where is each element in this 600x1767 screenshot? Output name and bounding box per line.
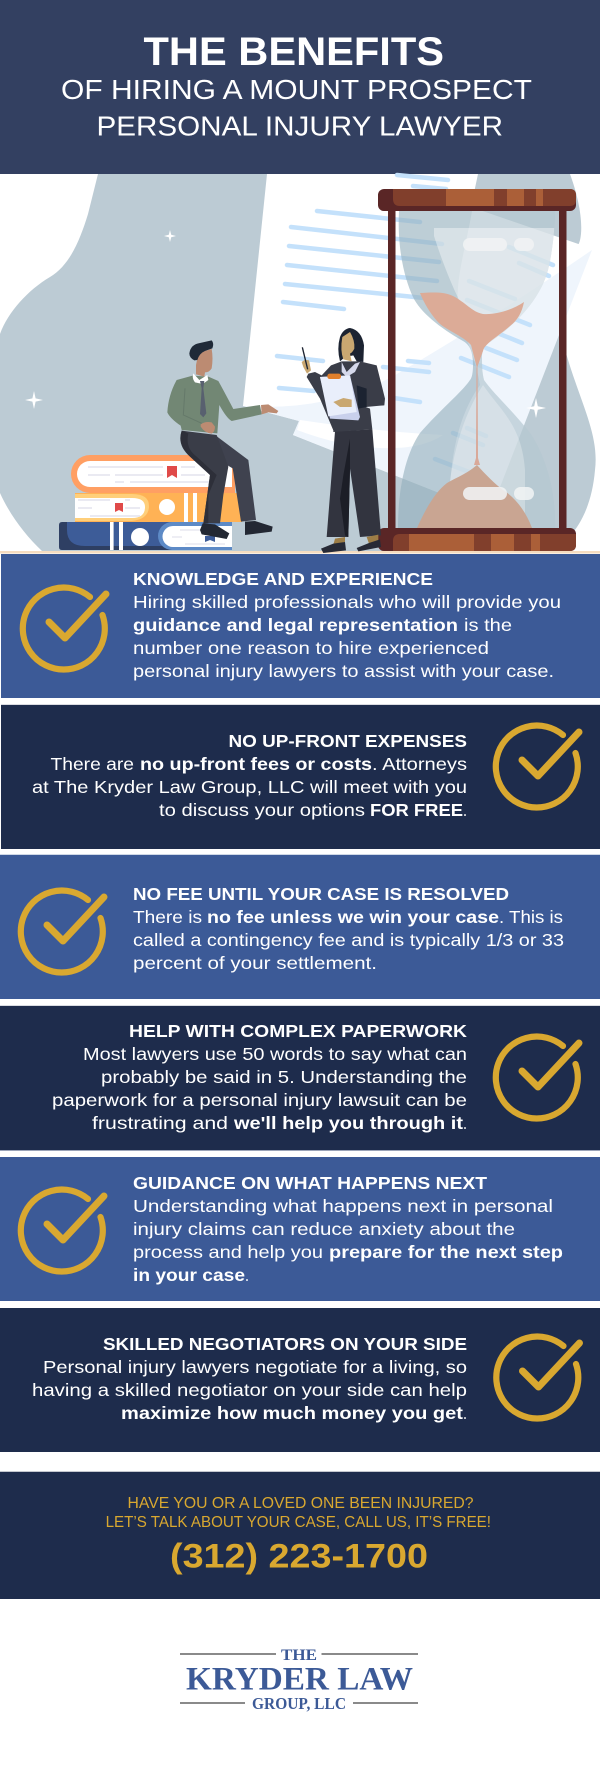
body text: personal injury lawyers to assist with your case.: [133, 661, 554, 681]
body text: There are: [50, 754, 134, 774]
body text: . This is: [499, 907, 563, 927]
body text: [133, 592, 561, 681]
sparkle stars: [25, 230, 176, 409]
man head: [196, 349, 212, 377]
body text: [32, 754, 467, 820]
panel: guidance on what happens next: [0, 1157, 600, 1301]
icon: check circle: [21, 1190, 104, 1272]
body text: .: [463, 800, 467, 820]
man hands: [201, 404, 278, 434]
man shoes: [200, 521, 273, 539]
logo: The Kryder Law Group: GROUP, LLC: [252, 1694, 346, 1713]
body text: is the: [464, 615, 512, 635]
body text: .: [463, 1113, 467, 1133]
call to action banner: [0, 1472, 600, 1599]
body text: Understanding what happens next in personal: [133, 1196, 553, 1216]
right post: [559, 205, 566, 533]
body text: in your case: [133, 1265, 245, 1285]
body text: maximize how much money you get: [121, 1403, 463, 1423]
top sand: [420, 292, 524, 368]
panel: knowledge and experience: [1, 554, 600, 698]
body text: Personal injury lawyers negotiate for a living, so: [43, 1357, 467, 1377]
body text: [52, 1044, 467, 1133]
body text: [32, 1357, 467, 1423]
glass sparkle: [526, 398, 546, 418]
body text: no fee unless we win your case: [207, 907, 499, 927]
body text: injury claims can reduce anxiety about the: [133, 1219, 515, 1239]
logo: The Kryder Law Group: THE: [281, 1647, 317, 1664]
body text: we'll help you through it: [233, 1113, 463, 1133]
icon: check circle: [23, 588, 106, 670]
call to action text: [106, 1495, 491, 1531]
heading: SKILLED NEGOTIATORS ON YOUR SIDE: [103, 1334, 467, 1354]
woman holding clipboard: [302, 328, 385, 553]
body text: probably be said in 5. Understanding the: [101, 1067, 467, 1087]
heading: GUIDANCE ON WHAT HAPPENS NEXT: [133, 1173, 487, 1193]
book stack: [59, 455, 242, 550]
subtitle line one: OF HIRING A MOUNT PROSPECT: [61, 74, 532, 105]
man tie: [200, 381, 206, 417]
body text: . Attorneys: [372, 754, 467, 774]
bottom bar: [378, 528, 576, 551]
icon: check circle: [496, 1337, 580, 1419]
pen: [302, 347, 308, 369]
body text: percent of your settlement.: [133, 953, 377, 973]
glass highlights: [463, 238, 534, 500]
woman collar: [342, 362, 360, 377]
bottom book: [59, 522, 232, 550]
panel: skilled negotiators on your side: [0, 1308, 600, 1452]
man leg shadow: [180, 431, 217, 523]
icon: check circle: [496, 1037, 579, 1119]
trouser shadow: [340, 439, 350, 537]
body text: .: [245, 1265, 249, 1285]
woman hair: [338, 328, 364, 362]
left post: [388, 205, 396, 533]
body text: There is: [133, 907, 202, 927]
body text: having a skilled negotiator on your side can help: [32, 1380, 467, 1400]
icon: check circle: [496, 726, 579, 808]
panel: no fee until your case is resolved: [0, 855, 600, 999]
body text: prepare for the next step: [329, 1242, 563, 1262]
man rear leg: [193, 433, 256, 522]
document text lines: [277, 175, 553, 472]
man collar: [193, 373, 208, 384]
background blob: [0, 174, 596, 551]
glass bulbs: [395, 205, 560, 535]
panel: help with complex paperwork: [0, 1006, 600, 1150]
body text: Hiring skilled professionals who will provide you: [133, 592, 561, 612]
title: THE BENEFITS: [144, 30, 444, 74]
bottom sand: [417, 465, 532, 528]
body text: paperwork for a personal injury lawsuit can be: [52, 1090, 467, 1110]
document page: [243, 174, 592, 513]
body text: frustrating and: [92, 1113, 228, 1133]
body text: process and help you: [133, 1242, 323, 1262]
heading: HELP WITH COMPLEX PAPERWORK: [129, 1021, 467, 1041]
phone number: (312) 223-1700: [170, 1538, 428, 1576]
body text: guidance and legal representation: [133, 615, 458, 635]
woman hands: [302, 360, 352, 407]
body text: [133, 1196, 563, 1285]
top book: [71, 455, 235, 493]
body text: [133, 907, 564, 973]
illustration: lawyers beside hourglass: [0, 174, 600, 554]
man seated on books: [167, 340, 278, 539]
body text: number one reason to hire experienced: [133, 638, 489, 658]
man sweater: [167, 376, 262, 433]
call to action text: LET’S TALK ABOUT YOUR CASE, CALL US, IT’S FREE!: [106, 1514, 491, 1531]
top bar: [378, 189, 576, 211]
man sweater fold: [183, 388, 202, 423]
floor line: [0, 551, 600, 554]
call to action text: HAVE YOU OR A LOVED ONE BEEN INJURED?: [128, 1495, 474, 1512]
heading: NO UP-FRONT EXPENSES: [228, 731, 467, 751]
woman trousers: [327, 429, 381, 537]
woman blazer: [307, 361, 385, 432]
icon: check circle: [21, 891, 104, 973]
man hair: [189, 340, 213, 360]
woman ankles: [333, 535, 378, 545]
body text: .: [463, 1403, 467, 1423]
body text: FOR FREE: [370, 800, 463, 820]
heading: KNOWLEDGE AND EXPERIENCE: [133, 569, 433, 589]
woman shoes: [321, 539, 381, 553]
man front leg: [181, 431, 228, 523]
body text: Most lawyers use 50 words to say what can: [83, 1044, 467, 1064]
hourglass: [378, 189, 576, 551]
middle book: [75, 493, 242, 522]
logo: The Kryder Law Group: [180, 1647, 418, 1713]
sand stream: [474, 364, 480, 465]
woman face: [341, 332, 354, 361]
subtitle line two: PERSONAL INJURY LAWYER: [96, 110, 503, 142]
body text: at The Kryder Law Group, LLC will meet with you: [32, 777, 467, 797]
clipboard: [320, 374, 360, 420]
blazer inner shadow: [357, 385, 367, 409]
header banner: [0, 0, 600, 174]
body text: to discuss your options: [159, 800, 365, 820]
heading: NO FEE UNTIL YOUR CASE IS RESOLVED: [133, 884, 509, 904]
logo: The Kryder Law Group: KRYDER LAW: [186, 1662, 413, 1698]
panel: no up-front expenses: [1, 705, 600, 849]
body text: no up-front fees or costs: [140, 754, 372, 774]
body text: called a contingency fee and is typically 1/3 or 33: [133, 930, 564, 950]
